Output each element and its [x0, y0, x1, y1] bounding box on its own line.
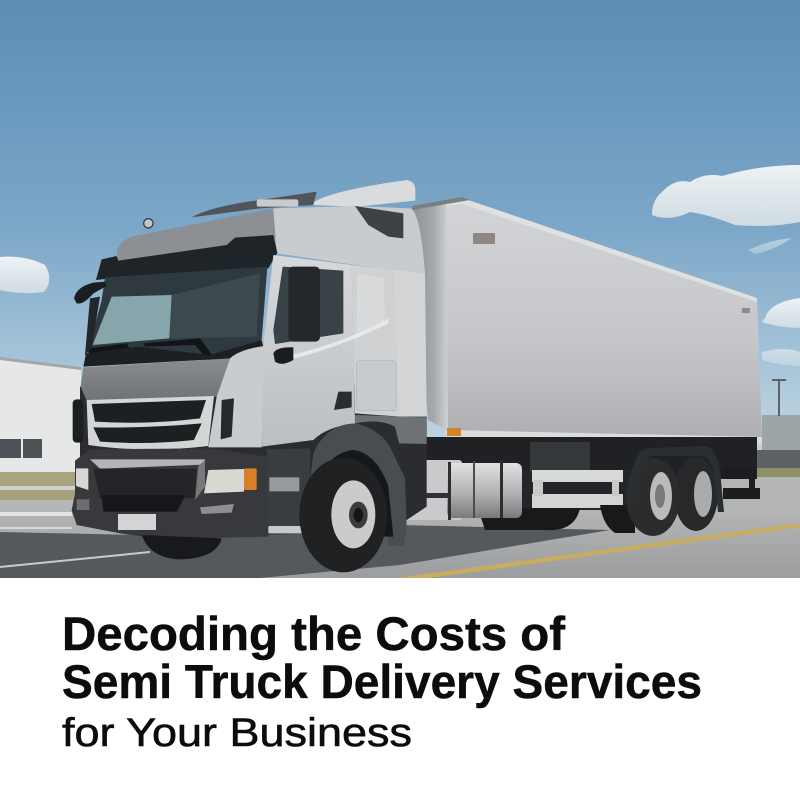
grass strips: [0, 472, 80, 486]
title: Semi Truck Delivery Services: [62, 655, 702, 708]
panel: truck photo scene: [0, 0, 800, 578]
door: [262, 255, 355, 447]
title: [62, 607, 702, 755]
rear door panel: [352, 265, 400, 417]
cab upper side: [273, 206, 425, 273]
door highlight: [275, 318, 388, 363]
warehouse left: [0, 357, 81, 472]
wheel arch: [308, 423, 407, 547]
truck illustration: [72, 180, 762, 572]
windshield: [88, 267, 267, 361]
roof fairing: [310, 180, 415, 207]
headlight: [204, 469, 244, 493]
mid wheels: [478, 505, 635, 533]
lower cab trim: [355, 415, 427, 444]
front wheel: [299, 458, 387, 572]
left mirror: [74, 282, 107, 304]
fuel tank: [402, 460, 522, 520]
front axle wheel: [142, 535, 222, 559]
white text panel: [0, 578, 800, 800]
license plate: [118, 514, 156, 530]
cab rear panel: [393, 270, 427, 417]
cab roof cap: [117, 208, 277, 261]
chassis: [392, 437, 760, 510]
door handle: [334, 392, 352, 410]
cab backing: [80, 347, 427, 535]
below windshield: [83, 340, 263, 367]
rear wheels: [625, 446, 724, 536]
air deflector: [355, 206, 403, 238]
side mirror: [288, 267, 320, 342]
title: Decoding the Costs of: [62, 607, 565, 660]
chrome bumper bar: [90, 459, 205, 469]
wipers: [88, 343, 138, 362]
clouds: [0, 165, 800, 366]
road markings and shadow: [0, 486, 800, 578]
road surface: [0, 500, 800, 578]
step bars: [532, 470, 623, 482]
side window: [273, 267, 343, 344]
lower bumper body: [72, 448, 268, 539]
sky: [0, 0, 800, 510]
rear fender: [625, 446, 724, 512]
cab: [72, 180, 427, 572]
visor: [96, 235, 277, 280]
roof lamp: [144, 219, 153, 228]
rear bumper: [722, 467, 755, 479]
grey front panel: [81, 358, 230, 401]
title: for Your Business: [62, 711, 412, 755]
grille chrome: [87, 396, 214, 449]
cargo box: [412, 197, 762, 444]
grille slats: [92, 400, 206, 423]
silver fender: [208, 346, 264, 447]
warehouse right and lamp post: [745, 379, 800, 468]
